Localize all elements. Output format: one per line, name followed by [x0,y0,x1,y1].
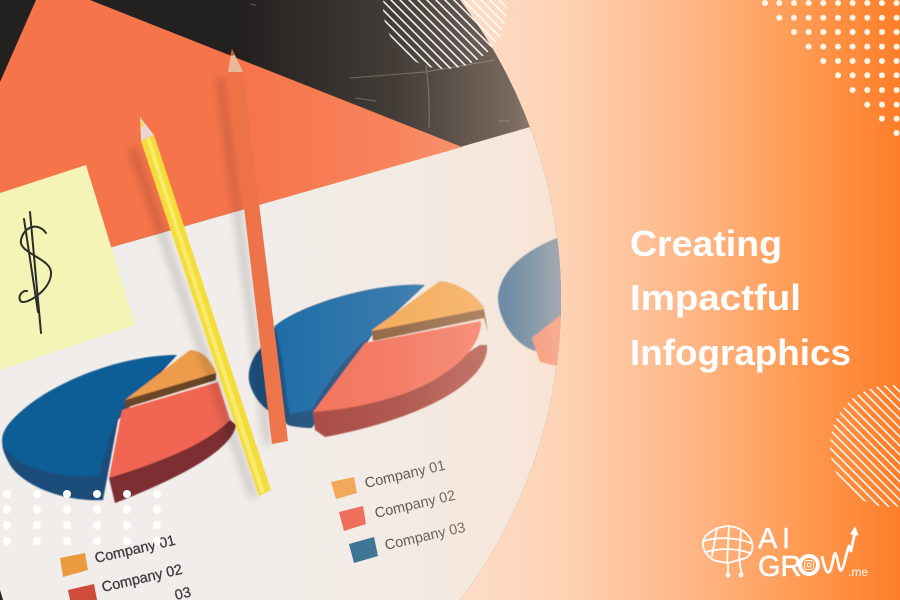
dark desk surface [0,0,561,600]
title: Creating [630,223,782,264]
fade overlay [280,0,561,600]
growth arrow [822,527,858,572]
circular photo of charts on a desk [0,0,561,600]
legend labels: Company 01 [363,458,447,492]
icon: network brain [703,526,753,576]
logo wordmark [758,523,868,583]
logo wordmark: .me [848,565,868,579]
pie chart left [2,350,236,503]
sticky note [0,165,135,370]
legend labels [93,533,193,600]
pie chart right [498,236,565,368]
dollar sign drawing [20,212,51,333]
yellow pencil [140,117,271,496]
title: Impactful [630,277,801,318]
legend swatches [331,477,378,563]
logo wordmark: AI [758,523,790,555]
pencil shadows [128,75,272,499]
orange paper [0,0,462,248]
dot triangle top right [762,0,900,136]
legend labels: Company 02 [100,562,184,596]
legend labels [365,460,465,549]
striped circle top [383,0,507,69]
logo wordmark: GR [758,551,802,583]
title [630,223,851,373]
legend left [60,533,193,600]
white dot grid bottom left [3,490,161,545]
legend labels: Company 01 [93,533,177,567]
pie chart middle [249,281,488,437]
legend labels: Company 02 [373,488,457,522]
legend swatches [60,553,97,600]
title: Infographics [630,332,851,373]
legend middle [331,458,467,563]
white chart paper [0,127,561,600]
desk scratches [250,4,510,128]
icon: instagram in letter O [800,556,818,574]
orange pencil [228,49,288,444]
legend labels: Company 03 [383,520,467,554]
striped circle bottom right [830,385,900,507]
logo: AI GROW .me [703,523,868,583]
